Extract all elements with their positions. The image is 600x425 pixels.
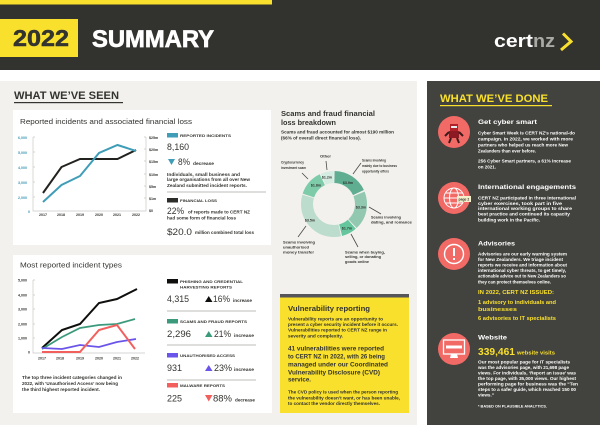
year badge: 2022 <box>13 25 69 51</box>
legend: reported incidents: large organisations from all over New <box>167 177 250 182</box>
icon: warning <box>438 238 470 270</box>
line chart: incidents and loss: 4,000 <box>18 166 27 170</box>
legend: reported incidents: Zealand submitted incident reports. <box>167 183 247 188</box>
line chart: incidents and loss: $10m <box>149 173 158 177</box>
vulnerability heading: Vulnerability reporting <box>288 304 370 313</box>
donut labels: Scams involving <box>371 216 402 220</box>
legend: phishing: 4,315 <box>167 294 189 305</box>
donut values: $3.9m <box>343 181 353 185</box>
vulnerability key figures: 41 vulnerabilities were reported <box>288 346 384 352</box>
legend: malware: 225 <box>167 394 182 404</box>
vulnerability intro <box>288 316 398 338</box>
legend: financial loss <box>167 198 254 238</box>
advisories text: they can protect themselves online. <box>478 280 551 284</box>
icon: robot mascot <box>438 116 470 148</box>
icon: monitor <box>438 333 470 365</box>
line chart: incidents and loss: 2,000 <box>18 196 27 200</box>
website text: the top page, with 35,000 views. Our highest <box>478 376 576 381</box>
legend: malware: MALWARE REPORTS <box>180 384 226 388</box>
chart title: Reported incidents and associated financial loss <box>20 117 192 126</box>
advisories issued: 1 advisory to individuals and <box>478 300 556 306</box>
legend: scams and fraud <box>167 319 256 346</box>
donut values: $3.3m <box>356 206 366 210</box>
legend: financial loss: million combined total loss <box>195 230 254 235</box>
legend: scams and fraud: 2,296 <box>167 329 191 340</box>
section: advisories: Advisories <box>478 240 515 248</box>
legend: phishing: 16% <box>213 294 230 305</box>
international text: cyber exercises, took part in five <box>478 201 563 206</box>
advisories issued: 6 advisories to IT specialists <box>478 316 556 322</box>
line chart: incident types: 4,000 <box>18 294 27 298</box>
breakdown summary: (66% of overall direct financial loss). <box>281 136 361 140</box>
international text <box>478 196 576 222</box>
line chart: incidents and loss: $1m <box>149 197 156 201</box>
legend: malware: decrease <box>235 398 255 402</box>
section: get cyber smart <box>438 116 575 170</box>
vulnerability key figures: Vulnerability Disclosure (CVD) <box>288 370 380 376</box>
line chart: incidents and loss: $20m <box>149 148 158 152</box>
vulnerability key figures <box>288 346 388 384</box>
website text: steps to a safer guide, which reached 150 00 <box>478 387 576 392</box>
section: advisories <box>438 238 567 322</box>
line chart: incidents and loss: 2018 <box>57 213 65 217</box>
donut values: $3.5m <box>305 218 315 222</box>
line chart: incident types: 0 <box>28 350 30 354</box>
legend: unauthorised access <box>167 353 256 380</box>
advisories issued: IN 2022, CERT NZ ISSUED: <box>478 290 554 296</box>
footnote: * BASED ON PLAUSIBLE ANALYTICS. <box>478 404 547 408</box>
vulnerability policy note: to contact the vendor directly themselves. <box>288 401 380 406</box>
donut chart <box>307 177 361 231</box>
title: SUMMARY <box>92 26 214 53</box>
donut labels: Scams involving <box>283 240 316 244</box>
legend: reported incidents: Individuals, small business and <box>167 172 240 177</box>
line chart: incidents and loss: 6,000 <box>18 136 27 140</box>
advisories issued <box>478 290 556 322</box>
website visits: 339,461 <box>478 346 515 358</box>
legend: scams and fraud: 21% <box>214 329 231 340</box>
section: website: Website <box>478 334 507 342</box>
panel: vulnerability reporting <box>280 294 409 413</box>
donut labels: money transfer <box>283 250 315 254</box>
get cyber smart text: campaign. In 2022, we worked with more <box>478 136 573 142</box>
website text: performing page for business was the “Ten <box>478 382 578 386</box>
get cyber smart text: Cyber Smart Week is CERT NZ’s national-do <box>478 130 575 136</box>
line chart: incident types: 2022 <box>131 356 139 360</box>
line chart: incident types: 1,000 <box>18 336 27 340</box>
breakdown summary <box>281 130 394 140</box>
donut values <box>305 176 366 230</box>
line chart: incidents and loss: $0 <box>149 209 153 213</box>
line chart: incidents and loss: $15m <box>149 160 158 164</box>
logo: certnz: nz <box>533 31 555 51</box>
legend: unauthorised access: 931 <box>167 363 182 374</box>
advisories text <box>478 252 567 284</box>
donut labels: mainly due to business <box>362 164 397 168</box>
website text <box>477 360 578 398</box>
section: international engagements: International engagements <box>478 184 576 191</box>
international text: building work in the Pacific. <box>478 218 540 222</box>
website text: Our most popular page for IT specialists <box>478 360 570 364</box>
legend: reported incidents: REPORTED INCIDENTS <box>180 134 232 138</box>
line chart: incidents and loss: 0 <box>28 210 30 214</box>
legend: financial loss: $20.0 <box>167 227 192 238</box>
heading: what we've seen: WHAT WE’VE SEEN <box>14 90 119 102</box>
donut labels: dating, and romance <box>371 220 412 224</box>
chart note: 2022, with ‘Unauthorised Access’ now being <box>22 381 118 386</box>
chart note: the third highest reported incident. <box>22 387 100 392</box>
website text: views.” <box>478 392 494 398</box>
vulnerability key figures: service. <box>288 376 311 384</box>
panel: reported incidents <box>13 110 271 245</box>
get cyber smart text: Zealanders than ever before. <box>478 148 536 154</box>
legend: unauthorised access: UNAUTHORISED ACCESS <box>180 354 236 358</box>
international text: best practice and continued its capacity <box>478 212 570 216</box>
line chart: incidents and loss: 2019 <box>76 213 84 217</box>
line chart: incident types: 2,000 <box>18 322 27 326</box>
panel: scams and fraud breakdown: loss breakdown <box>281 118 336 127</box>
vulnerability key figures: managed under our Coordinated <box>288 362 388 368</box>
legend: scams and fraud: increase <box>234 333 254 338</box>
website visits: website visits <box>516 350 555 356</box>
chart title: Most reported incident types <box>20 260 122 270</box>
legend: phishing <box>167 279 256 312</box>
line chart: incident types: 2021 <box>113 356 121 360</box>
line chart: incident types: 2017 <box>38 356 46 360</box>
donut labels: unauthorised <box>283 246 310 250</box>
advisories text: actionable advice out to New Zealanders so <box>478 274 566 278</box>
panel: what we've done <box>427 81 600 425</box>
legend: scams and fraud: SCAMS AND FRAUD REPORTS <box>180 320 248 324</box>
donut leader lines <box>298 161 381 247</box>
donut labels: Cryptocurrency <box>281 160 305 164</box>
donut labels: opportunity offers <box>362 170 389 174</box>
breakdown heading: Scams and fraud financial <box>281 109 375 118</box>
line chart: incidents and loss: 3,000 <box>18 181 27 185</box>
donut labels: selling, or donating <box>345 255 382 259</box>
vulnerability intro: Vulnerabilities reported to CERT NZ range in <box>288 328 387 332</box>
advisories text: Advisories are our early warning system <box>478 252 567 256</box>
vulnerability intro: severity and complexity. <box>288 334 343 338</box>
legend: phishing: PHISHING AND CREDENTIAL <box>180 280 244 284</box>
line chart: incidents and loss: 2022 <box>132 213 140 217</box>
line chart: incident types: 3,000 <box>18 308 27 312</box>
line chart: incidents and loss <box>18 136 158 217</box>
legend: financial loss: FINANCIAL LOSS <box>180 199 218 203</box>
legend: reported incidents: decrease <box>193 161 214 166</box>
donut labels: goods online <box>345 260 369 264</box>
get cyber smart text: 256 Cyber Smart partners, a 61% increase <box>478 158 571 164</box>
line chart: incident types: 2019 <box>76 356 84 360</box>
get cyber smart text: partners who helped us reach more New <box>478 142 568 148</box>
website text: was the advisories page, with 21,698 page <box>477 365 569 370</box>
vulnerability policy note: the vulnerability doesn’t want, or has been unable, <box>288 396 400 400</box>
legend: unauthorised access: 23% <box>214 363 233 374</box>
line chart: incidents and loss: $5m <box>149 185 156 189</box>
year badge <box>0 19 78 57</box>
line chart: incidents and loss: $25m <box>149 136 158 140</box>
advisories text: international cyber threats, to get timely, <box>478 268 566 273</box>
section: get cyber smart: Get cyber smart <box>478 119 538 126</box>
icon: globe: page 2 <box>458 198 469 202</box>
logo: certnz <box>494 31 571 51</box>
legend: malware: 88% <box>213 394 233 404</box>
section: international engagements <box>438 182 576 222</box>
legend: phishing: increase <box>233 298 252 303</box>
legend: phishing: HARVESTING REPORTS <box>180 286 233 290</box>
donut labels <box>281 154 412 264</box>
header band <box>0 0 600 70</box>
website visits <box>478 346 555 358</box>
panel: most reported incident types <box>13 255 272 413</box>
donut labels: investment scam <box>281 166 307 170</box>
vulnerability policy note: The CVD policy is used when the person reporting <box>288 390 398 394</box>
vulnerability policy note <box>288 390 400 406</box>
international text: CERT NZ participated in three international <box>478 196 576 200</box>
vulnerability intro: present a cyber security incident before it occurs. <box>288 322 398 327</box>
line chart: incidents and loss: 2021 <box>113 213 121 217</box>
heading: what we've done: WHAT WE’VE DONE <box>440 93 548 105</box>
chart note <box>22 375 122 392</box>
line chart: incidents and loss: 5,000 <box>18 151 27 155</box>
line chart: incidents and loss: 2020 <box>95 213 103 217</box>
line chart: incident types <box>18 278 145 360</box>
donut labels: Scams when buying, <box>345 250 385 254</box>
panel: scams and fraud breakdown <box>281 109 412 264</box>
donut values: $1.7m <box>342 226 352 230</box>
chart note: The top three incident categories changed in <box>22 375 122 380</box>
donut labels: Other <box>320 154 332 158</box>
section: website <box>438 333 578 408</box>
vulnerability intro: Vulnerability reports are an opportunity to <box>288 316 383 322</box>
donut labels: Scams involving <box>362 158 387 162</box>
advisories issued: businesses <box>478 307 517 313</box>
line chart: incident types: 2018 <box>56 356 64 360</box>
donut values: $1.8m <box>311 184 321 188</box>
advisories text: reports we receive and information about <box>478 262 567 268</box>
legend: financial loss: 22% <box>167 206 184 217</box>
vulnerability key figures: to CERT NZ in 2022, with 26 being <box>288 354 385 360</box>
international text: international working groups to share <box>478 206 572 211</box>
legend: reported incidents: 8,160 <box>167 142 189 153</box>
line chart: incident types: 2020 <box>95 356 103 360</box>
advisories text: for New Zealanders. We triage incident <box>478 257 563 262</box>
get cyber smart text <box>478 130 575 170</box>
legend: malware <box>167 383 255 404</box>
left background <box>0 81 417 425</box>
legend: financial loss: of reports made to CERT NZ <box>188 210 250 214</box>
legend: reported incidents: 8% <box>178 157 190 168</box>
donut values: $1.2m <box>322 176 332 180</box>
line chart: incidents and loss: 2017 <box>39 213 47 217</box>
legend: reported incidents <box>167 133 266 192</box>
logo: certnz: cert <box>494 31 533 51</box>
breakdown summary: Scams and fraud accounted for almost $190 million <box>281 130 394 134</box>
website text: views. For individuals, ‘Report an issue’ was <box>478 370 576 376</box>
legend: financial loss: had some form of financial loss <box>167 216 236 220</box>
get cyber smart text: on 2021. <box>478 164 496 170</box>
line chart: incident types: 5,000 <box>18 278 27 282</box>
legend: unauthorised access: increase <box>234 367 254 372</box>
